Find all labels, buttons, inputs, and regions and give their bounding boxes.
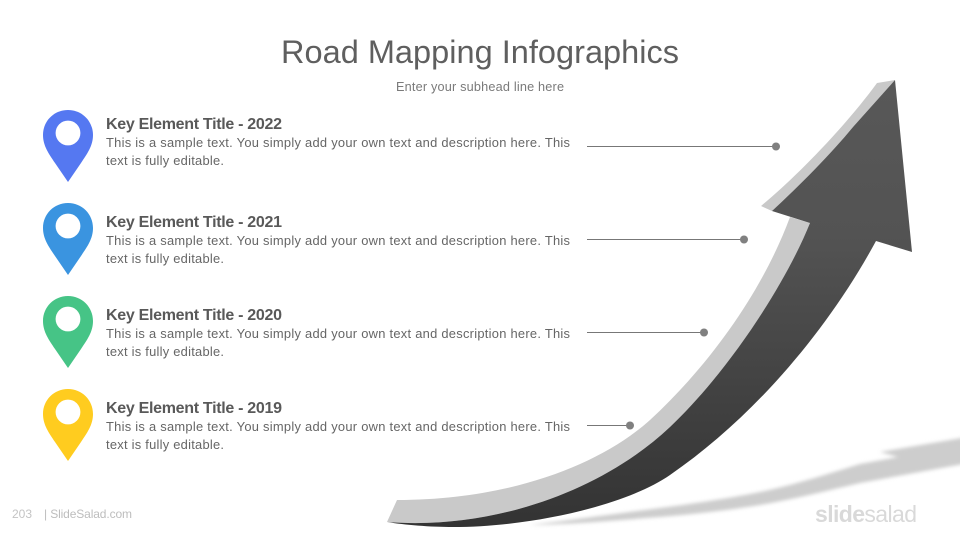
connector 2020	[587, 328, 708, 336]
subhead: Enter your subhead line here	[396, 80, 564, 94]
item 2020	[43, 296, 708, 368]
connector 2019	[587, 422, 634, 430]
item 2022	[43, 110, 780, 182]
heading 2021: Key Element Title - 2021	[106, 214, 282, 231]
text block 2020: This is a sample text. You simply add your own text and description here. This	[106, 326, 570, 341]
footer source: | SlideSalad.com	[44, 507, 132, 521]
arrow side face: shaft	[387, 217, 810, 523]
icon: yellow pin	[43, 389, 93, 461]
arrow front face	[387, 80, 912, 527]
text block 2021: This is a sample text. You simply add your own text and description here. This	[106, 233, 570, 248]
connector 2021	[587, 236, 748, 244]
text block 2022: This is a sample text. You simply add your own text and description here. This	[106, 135, 570, 150]
text block 2020: text is fully editable.	[106, 344, 224, 359]
text block 2021: text is fully editable.	[106, 251, 224, 266]
arrow	[387, 80, 912, 527]
text block 2019: text is fully editable.	[106, 437, 224, 452]
arrow shadow	[530, 434, 960, 525]
item 2019	[43, 389, 634, 461]
text block 2019: This is a sample text. You simply add your own text and description here. This	[106, 419, 570, 434]
connector 2022	[587, 142, 780, 150]
heading 2020: Key Element Title - 2020	[106, 307, 282, 324]
item 2021	[43, 203, 748, 275]
heading 2019: Key Element Title - 2019	[106, 400, 282, 417]
icon: blue pin	[43, 110, 93, 182]
logo: slidesalad	[815, 501, 917, 527]
text block 2022: text is fully editable.	[106, 153, 224, 168]
page number: 203	[12, 507, 32, 521]
arrow side face: head	[761, 80, 895, 211]
title: Road Mapping Infographics	[281, 34, 679, 70]
heading 2022: Key Element Title - 2022	[106, 116, 282, 133]
icon: sky blue pin	[43, 203, 93, 275]
icon: green pin	[43, 296, 93, 368]
